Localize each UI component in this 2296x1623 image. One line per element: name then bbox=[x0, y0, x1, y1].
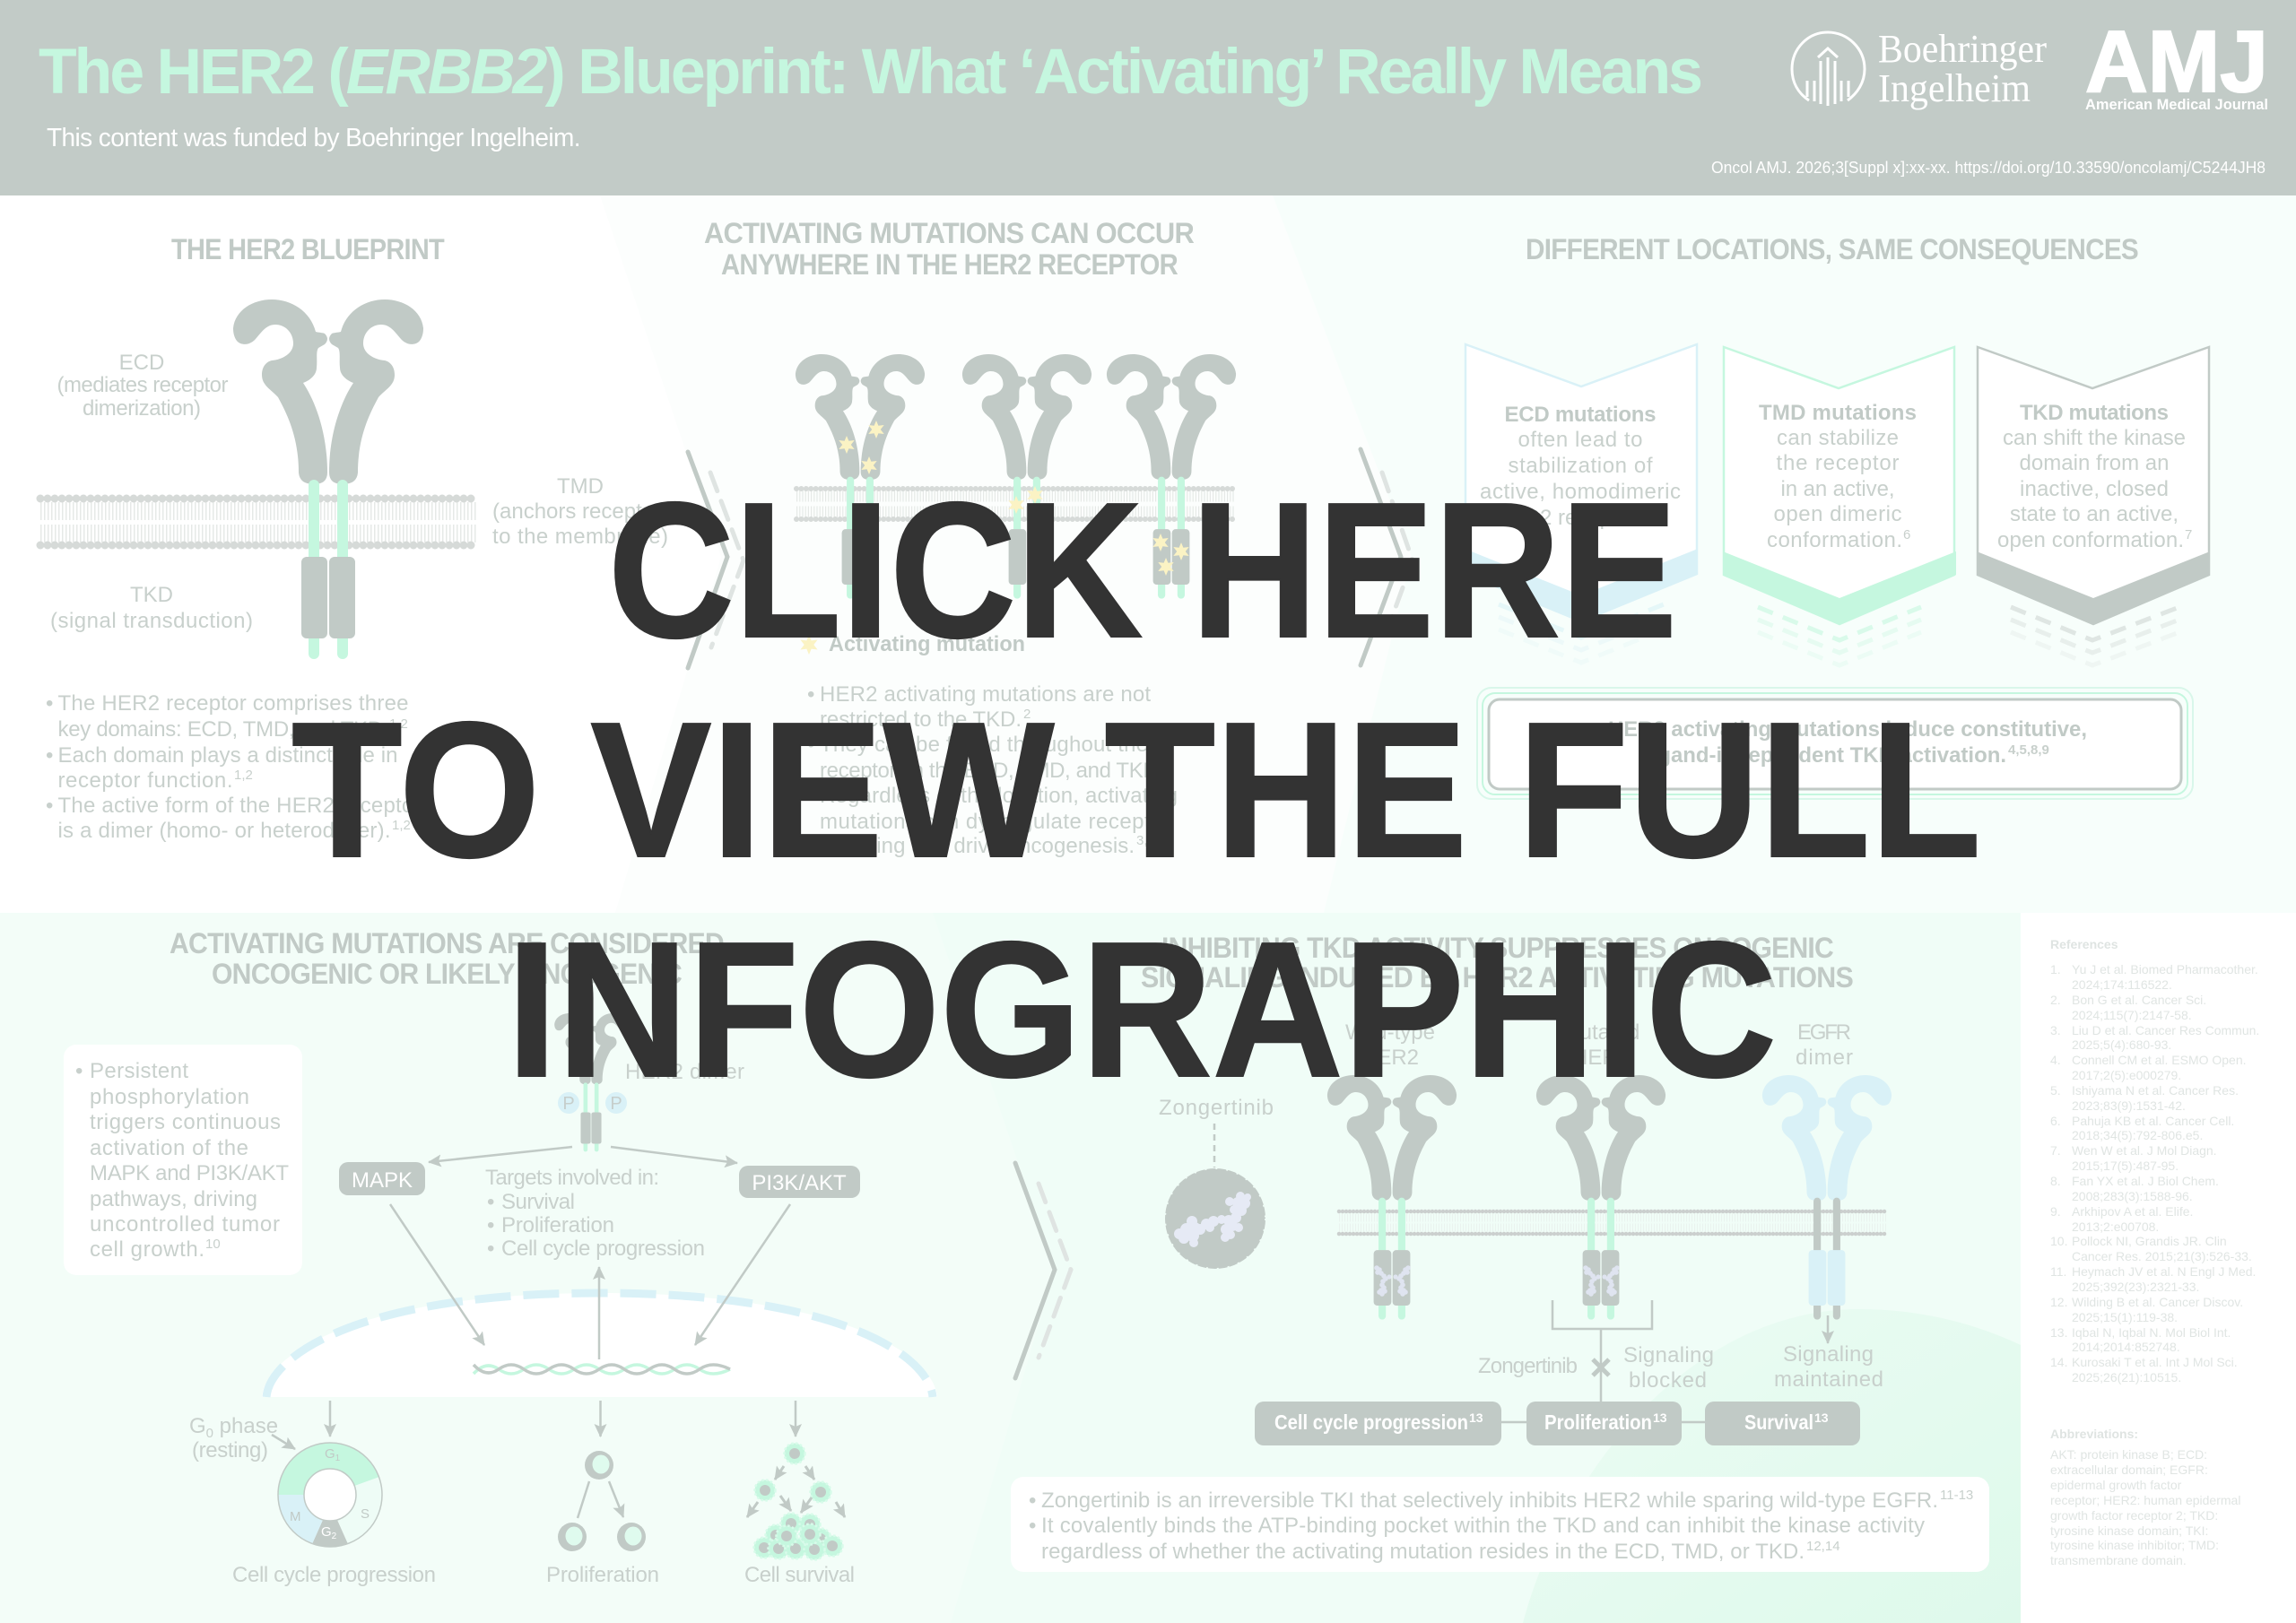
icon: Boehringer Ingelheim logo: Ingelheim bbox=[1878, 66, 2031, 110]
label: G0 phase: phase bbox=[213, 1414, 278, 1438]
heading bbox=[1141, 932, 1853, 994]
receptor: TKD mutations bbox=[1107, 354, 1236, 599]
references: 2023;83(9):1531-42. bbox=[2072, 1098, 2186, 1113]
callout: 4,5,8,9 bbox=[2008, 742, 2049, 758]
receptor: TMD mutations bbox=[962, 354, 1091, 599]
arrow: chevron panel 4 to 5 bbox=[1015, 1163, 1071, 1378]
callout bbox=[1477, 688, 2193, 799]
bullet text: mutations can dysregulate receptor bbox=[820, 810, 1170, 834]
references: Wilding B et al. Cancer Discov. bbox=[2072, 1295, 2243, 1309]
targets list: • bbox=[487, 1213, 494, 1237]
card: TMD mutations: TMD mutations bbox=[1759, 401, 1917, 425]
EGFR dimer: dimer bbox=[1796, 1046, 1853, 1070]
abbreviations: AKT: protein kinase B; ECD: bbox=[2050, 1447, 2207, 1462]
references: Iqbal N, Iqbal N. Mol Biol Int. bbox=[2072, 1325, 2231, 1340]
cell cycle donut: S bbox=[361, 1506, 370, 1522]
card: ECD mutations: HER2 receptors. bbox=[1494, 506, 1654, 530]
card: TMD mutations: the receptor bbox=[1776, 451, 1900, 475]
targets list: Survival bbox=[501, 1190, 575, 1214]
references: 8. bbox=[2050, 1174, 2061, 1188]
bullet text: • bbox=[46, 794, 53, 818]
heading: THE HER2 BLUEPRINT bbox=[171, 233, 445, 265]
card: TMD mutations bbox=[1723, 347, 1956, 665]
bullet text: • bbox=[46, 691, 53, 716]
outcome boxes: 13 bbox=[1653, 1410, 1667, 1425]
wild-type HER2 bbox=[1327, 1020, 1457, 1320]
label: Zongertinib signaling blocked bbox=[1478, 1343, 1714, 1393]
abbreviations: receptor; HER2: human epidermal bbox=[2050, 1493, 2240, 1507]
panel: oncogenic or likely oncogenic bbox=[64, 927, 937, 1587]
references: 2025;15(1):119-38. bbox=[2072, 1310, 2178, 1324]
bullet text: signaling and drive oncogenesis. bbox=[820, 834, 1135, 858]
references: 13. bbox=[2050, 1325, 2067, 1340]
cell cycle donut: G bbox=[325, 1446, 335, 1462]
overlay: click here call to action: INFOGRAPHIC bbox=[507, 901, 1777, 1117]
outcome boxes: Proliferation bbox=[1544, 1410, 1652, 1434]
targets list: • bbox=[487, 1237, 494, 1261]
wild-type HER2: Wild-type bbox=[1345, 1020, 1435, 1045]
references: 9. bbox=[2050, 1204, 2061, 1219]
bullet text: They can be found throughout the bbox=[820, 733, 1148, 757]
bullet text: 2 bbox=[1023, 707, 1031, 722]
references: Ishiyama N et al. Cancer Res. bbox=[2072, 1083, 2239, 1098]
heading bbox=[170, 927, 724, 990]
cell cycle donut: 2 bbox=[332, 1532, 337, 1541]
bullet text: is a dimer (homo- or heterodimer). bbox=[57, 819, 391, 843]
card: TKD mutations: open conformation. bbox=[1997, 528, 2184, 552]
label: Zongertinib signaling blocked: blocked bbox=[1629, 1368, 1707, 1393]
cell cycle donut: 1 bbox=[335, 1454, 341, 1463]
heading: ACTIVATING MUTATIONS ARE CONSIDERED bbox=[170, 927, 724, 959]
label: ECD: (mediates receptor bbox=[57, 373, 228, 397]
references: Fan YX et al. J Biol Chem. bbox=[2072, 1174, 2219, 1188]
bullet text: restricted to the TKD. bbox=[820, 707, 1022, 732]
bullet text: 1,2 bbox=[389, 716, 408, 732]
label: TKD: TKD bbox=[130, 583, 173, 607]
card: ECD mutations: 5 bbox=[1656, 505, 1663, 520]
text box: 11-13 bbox=[1940, 1488, 1973, 1503]
bullet text: 3,4 bbox=[1136, 833, 1155, 848]
label: proliferation: Proliferation bbox=[546, 1563, 659, 1587]
panel: different locations same consequences bbox=[1465, 233, 2210, 799]
HER2 dimer: HER2 dimer bbox=[625, 1060, 744, 1084]
card: TKD mutations bbox=[1977, 347, 2210, 665]
label: TKD: (signal transduction) bbox=[50, 609, 253, 633]
label: TKD bbox=[50, 583, 253, 633]
icon: AMJ logo: American Medical Journal bbox=[2085, 96, 2268, 113]
panel: the HER2 blueprint bbox=[40, 233, 668, 843]
references: 2025;392(23):2321-33. bbox=[2072, 1280, 2199, 1294]
icon: zongertinib molecule bbox=[1165, 1168, 1265, 1269]
references: Bon G et al. Cancer Sci. bbox=[2072, 993, 2206, 1007]
text box: pathways, driving bbox=[90, 1187, 257, 1211]
overlay: click here call to action bbox=[291, 462, 1981, 1117]
bullet text bbox=[46, 691, 422, 843]
references: 5. bbox=[2050, 1083, 2061, 1098]
overlay: click here call to action: TO VIEW THE FULL bbox=[291, 681, 1981, 898]
label: G0 phase bbox=[189, 1414, 295, 1462]
references bbox=[2050, 937, 2259, 1567]
HER2 dimer: P bbox=[562, 1094, 575, 1114]
label: G0 phase: G bbox=[189, 1414, 206, 1438]
blocked signalling bracket bbox=[1552, 1300, 1652, 1402]
mutated HER2: HER2 bbox=[1572, 1046, 1630, 1070]
references: Liu D et al. Cancer Res Commun. bbox=[2072, 1023, 2259, 1037]
HER2 dimer: P bbox=[610, 1094, 622, 1114]
node: PI3K/AKT bbox=[739, 1166, 860, 1198]
panel: activating mutations anywhere bbox=[704, 217, 1236, 858]
bullet text: The HER2 receptor comprises three bbox=[57, 691, 409, 716]
abbreviations bbox=[2050, 1427, 2240, 1567]
bullet text: 1,2 bbox=[234, 768, 253, 783]
label: TMD bbox=[492, 474, 668, 549]
label: ECD: dimerization) bbox=[83, 396, 201, 421]
bullet text: Each domain plays a distinct role in bbox=[57, 743, 398, 768]
bullet text: The active form of the HER2 receptor bbox=[57, 794, 422, 818]
references: 4. bbox=[2050, 1053, 2061, 1067]
references: References bbox=[2050, 937, 2118, 951]
HER2 receptor dimer bbox=[233, 299, 423, 659]
label: Zongertinib signaling blocked: Zongertinib bbox=[1478, 1354, 1578, 1378]
DNA bbox=[474, 1365, 730, 1374]
abbreviations: epidermal growth factor bbox=[2050, 1478, 2182, 1492]
legend: activating mutation: Activating mutation bbox=[829, 632, 1025, 656]
targets list: Proliferation bbox=[501, 1213, 614, 1237]
signalling arrows bbox=[330, 1147, 796, 1436]
references: 2025;5(4):680-93. bbox=[2072, 1037, 2171, 1052]
mutated HER2: Mutated bbox=[1562, 1020, 1639, 1045]
bullet text: • bbox=[807, 784, 814, 808]
icon: AMJ logo: AMJ bbox=[2085, 13, 2268, 110]
label: signaling maintained: Signaling bbox=[1783, 1342, 1874, 1367]
text box: MAPK and PI3K/AKT bbox=[90, 1161, 289, 1185]
references: 12. bbox=[2050, 1295, 2067, 1309]
card: TKD mutations: TKD mutations bbox=[2020, 401, 2169, 425]
references: Wen W et al. J Mol Diagn. bbox=[2072, 1143, 2217, 1158]
references: Yu J et al. Biomed Pharmacother. bbox=[2072, 962, 2258, 976]
arrow: chevron panel 1 to 2 bbox=[688, 452, 744, 668]
targets list: • bbox=[487, 1190, 494, 1214]
references: Heymach JV et al. N Engl J Med. bbox=[2072, 1264, 2256, 1279]
references: 2018;34(5):792-806.e5. bbox=[2072, 1128, 2203, 1142]
card: ECD mutations: active, homodimeric bbox=[1480, 480, 1681, 504]
references: 2024;115(7):2147-58. bbox=[2072, 1008, 2192, 1022]
heading: ONCOGENIC OR LIKELY ONCOGENIC bbox=[212, 958, 683, 990]
membrane bbox=[40, 499, 476, 545]
bullet text: Regardless of the location, activating bbox=[820, 784, 1178, 808]
membrane bbox=[1339, 1211, 1887, 1234]
label: G0 phase: 0 bbox=[206, 1426, 213, 1441]
text box: phosphorylation bbox=[90, 1085, 249, 1109]
icon: Boehringer Ingelheim logo bbox=[1792, 27, 2047, 110]
card: TMD mutations: open dimeric bbox=[1774, 502, 1901, 526]
card: TKD mutations: domain from an bbox=[2020, 451, 2169, 475]
cell cycle donut: M bbox=[290, 1509, 301, 1524]
text box: • bbox=[1029, 1514, 1036, 1538]
label: ECD bbox=[57, 351, 228, 421]
abbreviations: growth factor receptor 2; TKD: bbox=[2050, 1508, 2218, 1523]
header band bbox=[0, 0, 2296, 195]
panel: inhibiting TKD activity bbox=[1011, 932, 1989, 1572]
label: cell survival: Cell survival bbox=[744, 1563, 855, 1587]
bullet text bbox=[807, 682, 1178, 858]
text box: cell growth. bbox=[90, 1237, 204, 1262]
abbreviations: transmembrane domain. bbox=[2050, 1553, 2187, 1567]
references: 3. bbox=[2050, 1023, 2061, 1037]
text box: 10 bbox=[205, 1237, 221, 1252]
survival cells bbox=[747, 1444, 845, 1560]
references: 2008;283(3):1588-96. bbox=[2072, 1189, 2193, 1203]
arrow: chevron panel 2 to 3 bbox=[1361, 449, 1413, 665]
abbreviations: Abbreviations: bbox=[2050, 1427, 2138, 1441]
label: cell cycle progression: Cell cycle progression bbox=[232, 1563, 436, 1587]
mutated HER2 bbox=[1536, 1020, 1665, 1320]
label: signaling maintained: maintained bbox=[1774, 1367, 1883, 1392]
abbreviations: tyrosine kinase domain; TKI: bbox=[2050, 1523, 2208, 1538]
text box: regardless of whether the activating mutation resides in the ECD, TMD, or TKD. bbox=[1041, 1540, 1805, 1564]
funding statement: This content was funded by Boehringer Ingelheim. bbox=[47, 124, 580, 152]
heading: DIFFERENT LOCATIONS, SAME CONSEQUENCES bbox=[1526, 233, 2138, 265]
card: TMD mutations: in an active, bbox=[1781, 477, 1894, 501]
icon: Boehringer Ingelheim logo: Boehringer bbox=[1878, 27, 2047, 71]
targets list: Cell cycle progression bbox=[501, 1237, 705, 1261]
bullet text: 1,2 bbox=[392, 818, 411, 833]
references: 2. bbox=[2050, 993, 2061, 1007]
text box: Persistent bbox=[90, 1059, 188, 1083]
wild-type HER2: HER2 bbox=[1361, 1046, 1419, 1070]
label: TMD: TMD bbox=[557, 474, 604, 499]
references: 1. bbox=[2050, 962, 2061, 976]
card: TKD mutations: inactive, closed bbox=[2020, 477, 2169, 501]
label: ECD: ECD bbox=[119, 351, 164, 375]
bullet text: 2 bbox=[1166, 758, 1173, 773]
nucleus bbox=[262, 1293, 937, 1397]
label: TMD: to the membrane) bbox=[492, 525, 668, 549]
text box: • bbox=[75, 1059, 83, 1083]
cell cycle donut bbox=[278, 1443, 382, 1547]
card: TMD mutations: conformation. bbox=[1767, 528, 1902, 552]
references: 2013;2:e00708. bbox=[2072, 1219, 2159, 1234]
bullet text: receptor function. bbox=[57, 768, 233, 793]
label: signaling maintained bbox=[1774, 1315, 1883, 1392]
bullet text: receptor: in the ECD, TMD, and TKD. bbox=[820, 759, 1164, 783]
card: ECD mutations: ECD mutations bbox=[1505, 403, 1656, 427]
node: PI3K/AKT: PI3K/AKT bbox=[752, 1171, 847, 1195]
references: 2017;2(5):e000279. bbox=[2072, 1068, 2181, 1082]
references: 14. bbox=[2050, 1355, 2067, 1369]
citation: Oncol AMJ. 2026;3[Suppl x]:xx-xx. https://doi.org/10.33590/oncolamj/C5244JH8 bbox=[1711, 159, 2266, 177]
references: Pollock NI, Grandis JR. Clin bbox=[2072, 1234, 2227, 1248]
text box: • bbox=[1029, 1488, 1036, 1513]
dashed drug line bbox=[1213, 1124, 1215, 1167]
references: Kurosaki T et al. Int J Mol Sci. bbox=[2072, 1355, 2238, 1369]
card: TKD mutations: can shift the kinase bbox=[2003, 426, 2186, 450]
title: The HER2 (ERBB2) Blueprint: What ‘Activating’ Really Means bbox=[39, 37, 1701, 108]
text box: uncontrolled tumor bbox=[90, 1212, 280, 1237]
text box: It covalently binds the ATP-binding pocket within the TKD and can inhibit the kinase activity bbox=[1041, 1514, 1925, 1538]
bullet text: key domains: ECD, TMD, and TKD. bbox=[57, 717, 389, 742]
references: 2025;26(21):10515. bbox=[2072, 1370, 2181, 1384]
references: 2015;17(5):487-95. bbox=[2072, 1159, 2179, 1173]
heading: INHIBITING TKD ACTIVITY SUPPRESSES ONCOGENIC bbox=[1161, 932, 1834, 964]
card: TMD mutations: 6 bbox=[1903, 527, 1910, 542]
text box: 12,14 bbox=[1806, 1539, 1840, 1554]
text box: activation of the bbox=[90, 1136, 248, 1160]
overlay: click here call to action: CLICK HERE bbox=[608, 462, 1677, 678]
callout: HER2 activating mutations induce constitutive, bbox=[1608, 717, 2087, 742]
text box bbox=[1011, 1477, 1989, 1572]
HER2 dimer bbox=[554, 1013, 744, 1151]
bullet text: HER2 activating mutations are not bbox=[820, 682, 1151, 707]
outcome boxes: Cell cycle progression bbox=[1274, 1410, 1468, 1434]
node: MAPK bbox=[339, 1162, 425, 1195]
references: 11. bbox=[2050, 1264, 2066, 1279]
label: G0 phase: (resting) bbox=[192, 1438, 268, 1462]
EGFR dimer bbox=[1762, 1020, 1892, 1320]
card: TMD mutations: can stabilize bbox=[1777, 426, 1899, 450]
proliferation cells bbox=[558, 1451, 646, 1551]
references: 7. bbox=[2050, 1143, 2061, 1158]
card: ECD mutations: often lead to bbox=[1518, 428, 1643, 452]
abbreviations: tyrosine kinase inhibitor; TMD: bbox=[2050, 1538, 2219, 1552]
label: Zongertinib: Zongertinib bbox=[1159, 1096, 1274, 1120]
references: 6. bbox=[2050, 1114, 2061, 1128]
callout: ligand-independent TKD activation. bbox=[1646, 743, 2006, 768]
heading bbox=[704, 217, 1195, 281]
outcome boxes bbox=[1255, 1402, 1860, 1445]
outcome boxes: 13 bbox=[1814, 1410, 1829, 1425]
references: 2024;174:116522. bbox=[2072, 977, 2172, 992]
label: Zongertinib signaling blocked: Signaling bbox=[1623, 1343, 1714, 1367]
abbreviations: extracellular domain; EGFR: bbox=[2050, 1462, 2208, 1477]
card: TKD mutations: 7 bbox=[2185, 527, 2192, 542]
references: Pahuja KB et al. Cancer Cell. bbox=[2072, 1114, 2234, 1128]
references: Arkhipov A et al. Elife. bbox=[2072, 1204, 2193, 1219]
receptor: ECD mutations bbox=[796, 354, 925, 599]
targets list bbox=[485, 1166, 705, 1261]
outcome boxes: 13 bbox=[1469, 1410, 1483, 1425]
heading: SIGNALING INDUCED BY HER2 ACTIVATING MUTATIONS bbox=[1141, 961, 1853, 994]
targets list: Targets involved in: bbox=[485, 1166, 659, 1190]
card: ECD mutations bbox=[1465, 344, 1698, 663]
references: 2014;2014:852748. bbox=[2072, 1340, 2180, 1354]
card: TKD mutations: state to an active, bbox=[2010, 502, 2179, 526]
EGFR dimer: EGFR bbox=[1797, 1020, 1851, 1045]
references: 10. bbox=[2050, 1234, 2067, 1248]
text box: Zongertinib is an irreversible TKI that selectively inhibits HER2 while sparing wild-type EGFR. bbox=[1041, 1488, 1938, 1513]
bullet text: • bbox=[807, 682, 814, 707]
references: Connell CM et al. ESMO Open. bbox=[2072, 1053, 2247, 1067]
card: ECD mutations: stabilization of bbox=[1509, 454, 1653, 478]
membrane bbox=[796, 489, 1234, 519]
heading: ACTIVATING MUTATIONS CAN OCCUR bbox=[704, 217, 1195, 249]
label: TMD: (anchors receptor bbox=[492, 499, 661, 524]
text box bbox=[64, 1045, 302, 1275]
node: MAPK: MAPK bbox=[352, 1168, 413, 1193]
heading: ANYWHERE IN THE HER2 RECEPTOR bbox=[721, 248, 1178, 281]
text box: triggers continuous bbox=[90, 1110, 281, 1134]
references: Cancer Res. 2015;21(3):526-33. bbox=[2072, 1249, 2252, 1263]
outcome boxes: Survival bbox=[1744, 1410, 1813, 1434]
cell cycle donut: G bbox=[321, 1524, 332, 1540]
bullet text: • bbox=[807, 733, 814, 757]
bullet text: • bbox=[46, 743, 53, 768]
